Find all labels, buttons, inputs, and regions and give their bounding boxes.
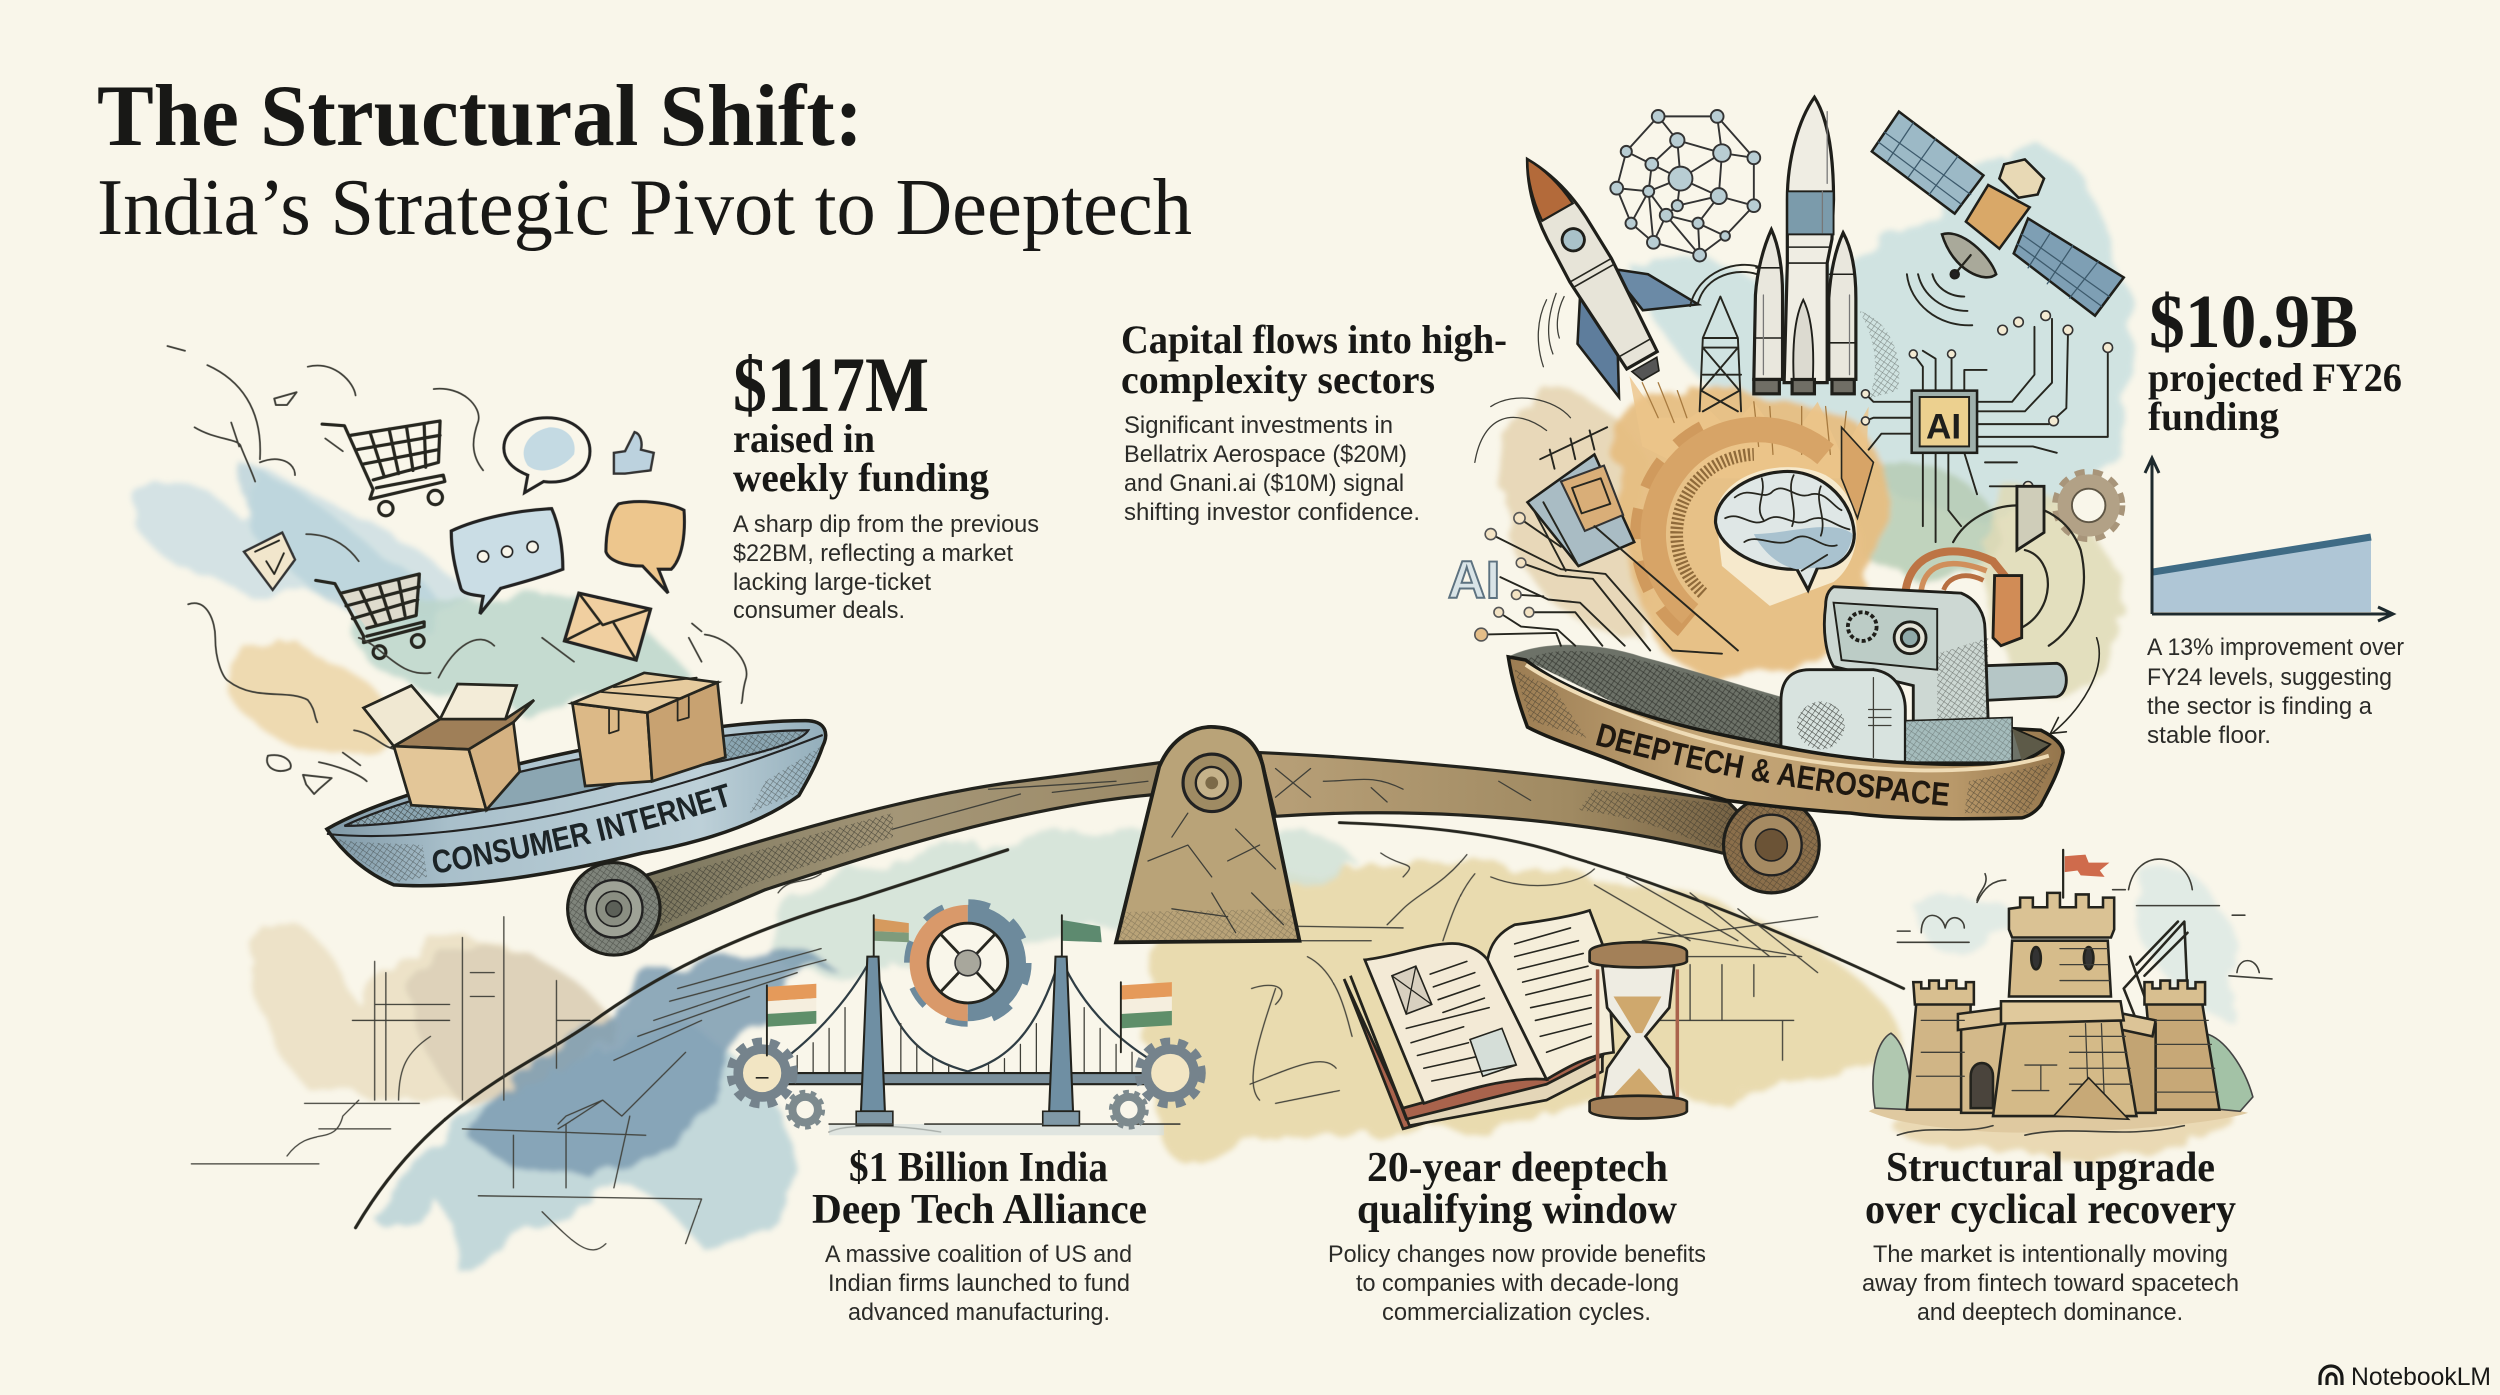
icon: AI outline label and traces	[1448, 513, 1738, 654]
text block: structural upgrade	[1862, 1145, 2239, 1326]
icon: machinery	[1781, 486, 2084, 762]
arrow: small pointer	[2050, 638, 2099, 733]
text block: consumer funding stat: weekly funding	[733, 455, 989, 500]
scale: beam, fulcrum and wheels	[324, 672, 1821, 957]
icon: central gear	[904, 899, 1025, 1027]
icon: side gears	[730, 1041, 1202, 1127]
icon: closed box	[572, 673, 725, 786]
icon: AI chip and circuit traces	[1861, 311, 2113, 542]
icon: castle	[1897, 893, 2219, 1135]
icon: molecule network	[1610, 110, 1760, 261]
illustration: globe curve	[191, 823, 1904, 1250]
mound and trees	[1869, 1033, 2253, 1133]
right pan: deeptech and aerospace	[1506, 654, 2065, 820]
text block: alliance: A massive coalition of US and	[825, 1241, 1132, 1268]
text block: qualifying window: 20-year deeptech	[1367, 1145, 1668, 1191]
text block: consumer funding stat: raised in	[733, 416, 875, 461]
text block: projected funding note: A 13% improvement over	[2147, 634, 2404, 661]
right pan: deeptech and aerospace: DEEPTECH & AEROSPACE	[1596, 723, 1949, 806]
icon: round speech bubble	[504, 418, 590, 493]
text block: alliance	[812, 1145, 1147, 1326]
icon: thumbs up	[614, 432, 654, 474]
text block: structural upgrade: The market is intentionally moving	[1873, 1241, 2228, 1268]
icon: central launch vehicle	[1754, 97, 1856, 394]
text block: qualifying window: to companies with decade-long	[1356, 1270, 1679, 1297]
icon: suspension bridge	[759, 957, 1180, 1135]
illustration: castle under construction	[1869, 850, 2272, 1135]
icon: device panel	[1527, 427, 1634, 571]
right beam arm	[1260, 753, 1778, 853]
text block: capital flows: shifting investor confidence.	[1124, 499, 1420, 526]
pan interior hatching	[1526, 651, 1818, 753]
pan interior	[1508, 645, 2057, 761]
text block: consumer funding stat: $117M	[733, 341, 929, 428]
text block: qualifying window	[1328, 1145, 1706, 1326]
icon: shopping cart lower	[316, 574, 424, 658]
right pivot wheel	[1724, 797, 1819, 893]
text block: alliance: $1 Billion India	[849, 1145, 1108, 1191]
title: The Structural Shift:	[97, 68, 863, 165]
text block: capital flows: Bellatrix Aerospace ($20M)	[1124, 441, 1407, 468]
scribbled lines	[167, 346, 747, 781]
text block: alliance: Deep Tech Alliance	[812, 1187, 1147, 1233]
illustration: book and hourglass	[1344, 910, 1687, 1129]
chart: funding area	[2145, 458, 2393, 621]
text block: consumer funding stat: lacking large-ticket	[733, 569, 931, 596]
left pan: consumer internet	[324, 718, 866, 926]
icon: rocket motion lines	[1475, 273, 1979, 462]
illustration: bridge and alliance gears	[730, 899, 1202, 1135]
text block: capital flows: and Gnani.ai ($10M) signal	[1124, 470, 1404, 497]
fulcrum	[1116, 727, 1299, 942]
watercolor washes	[131, 146, 2235, 1271]
left pivot wheel	[568, 863, 660, 955]
text block: capital flows: Significant investments in	[1124, 412, 1393, 439]
text block: projected funding stat: projected FY26	[2148, 355, 2402, 400]
icon: small parcel	[244, 533, 295, 590]
left beam arm	[630, 762, 1164, 941]
text block: projected funding note: the sector is finding a	[2147, 693, 2372, 720]
icon: large gear	[1644, 427, 1873, 625]
title: India’s Strategic Pivot to Deeptech	[97, 164, 1192, 252]
icon: open box	[364, 684, 534, 810]
icon: envelope	[564, 593, 651, 660]
text block: consumer funding stat: $22BM, reflecting a market	[733, 540, 1013, 567]
icon: left rocket	[1486, 122, 1719, 402]
icon: exhaust flames	[1629, 376, 1869, 478]
icon: launch tower	[1690, 265, 1762, 411]
title	[97, 68, 1192, 252]
icon: open book	[1344, 910, 1614, 1129]
illustration: deeptech collage	[1448, 94, 2126, 856]
icon: brain	[1716, 471, 1854, 590]
text block: structural upgrade: over cyclical recovery	[1865, 1187, 2236, 1233]
icon: satellite	[1872, 112, 2124, 325]
illustration: floating consumer icons	[167, 346, 747, 794]
text block: projected funding stat	[2148, 280, 2402, 439]
text block: alliance: advanced manufacturing.	[848, 1299, 1110, 1326]
text block: capital flows: complexity sectors	[1121, 357, 1435, 402]
text block: consumer funding stat	[733, 341, 1039, 624]
icon: small gear	[2056, 473, 2121, 538]
icon: hatched dome	[1859, 311, 1899, 399]
icon: chat bubble with dots	[451, 509, 563, 614]
icon: castle flag	[2063, 850, 2109, 898]
icon: flags	[767, 915, 1172, 1055]
icon: hourglass	[1590, 942, 1687, 1118]
icon: orange speech bubble	[606, 502, 684, 593]
icon: AI outline label and traces: AI	[1448, 551, 1500, 610]
text block: qualifying window: qualifying window	[1357, 1187, 1678, 1233]
icon: AI chip and circuit traces: AI	[1926, 407, 1961, 446]
text block: structural upgrade: Structural upgrade	[1886, 1145, 2215, 1191]
text block: capital flows	[1121, 317, 1507, 526]
text block: qualifying window: Policy changes now provide benefits	[1328, 1241, 1706, 1268]
text block: projected funding note: FY24 levels, suggesting	[2147, 664, 2392, 691]
text block: consumer funding stat: consumer deals.	[733, 597, 905, 624]
NotebookLM mark: NotebookLM	[2351, 1363, 2491, 1391]
text block: structural upgrade: and deeptech dominance.	[1917, 1299, 2183, 1326]
icon: shopping cart top	[322, 421, 445, 516]
text block: structural upgrade: away from fintech toward spacetech	[1862, 1270, 2239, 1297]
text block: projected funding stat: funding	[2148, 394, 2279, 439]
sketched clouds	[1897, 859, 2272, 979]
left pan: consumer internet: CONSUMER INTERNET	[432, 783, 728, 872]
text block: projected funding stat: $10.9B	[2149, 280, 2358, 364]
text block: consumer funding stat: A sharp dip from the previous	[733, 511, 1039, 538]
text block: alliance: Indian firms launched to fund	[828, 1270, 1130, 1297]
text block: projected funding note: stable floor.	[2147, 722, 2271, 749]
icon: crane	[2124, 922, 2188, 1020]
text block: capital flows: Capital flows into high-	[1121, 317, 1507, 362]
small paper scraps	[267, 392, 332, 794]
text block: qualifying window: commercialization cycles.	[1382, 1299, 1651, 1326]
text block: projected funding note	[2147, 634, 2404, 749]
